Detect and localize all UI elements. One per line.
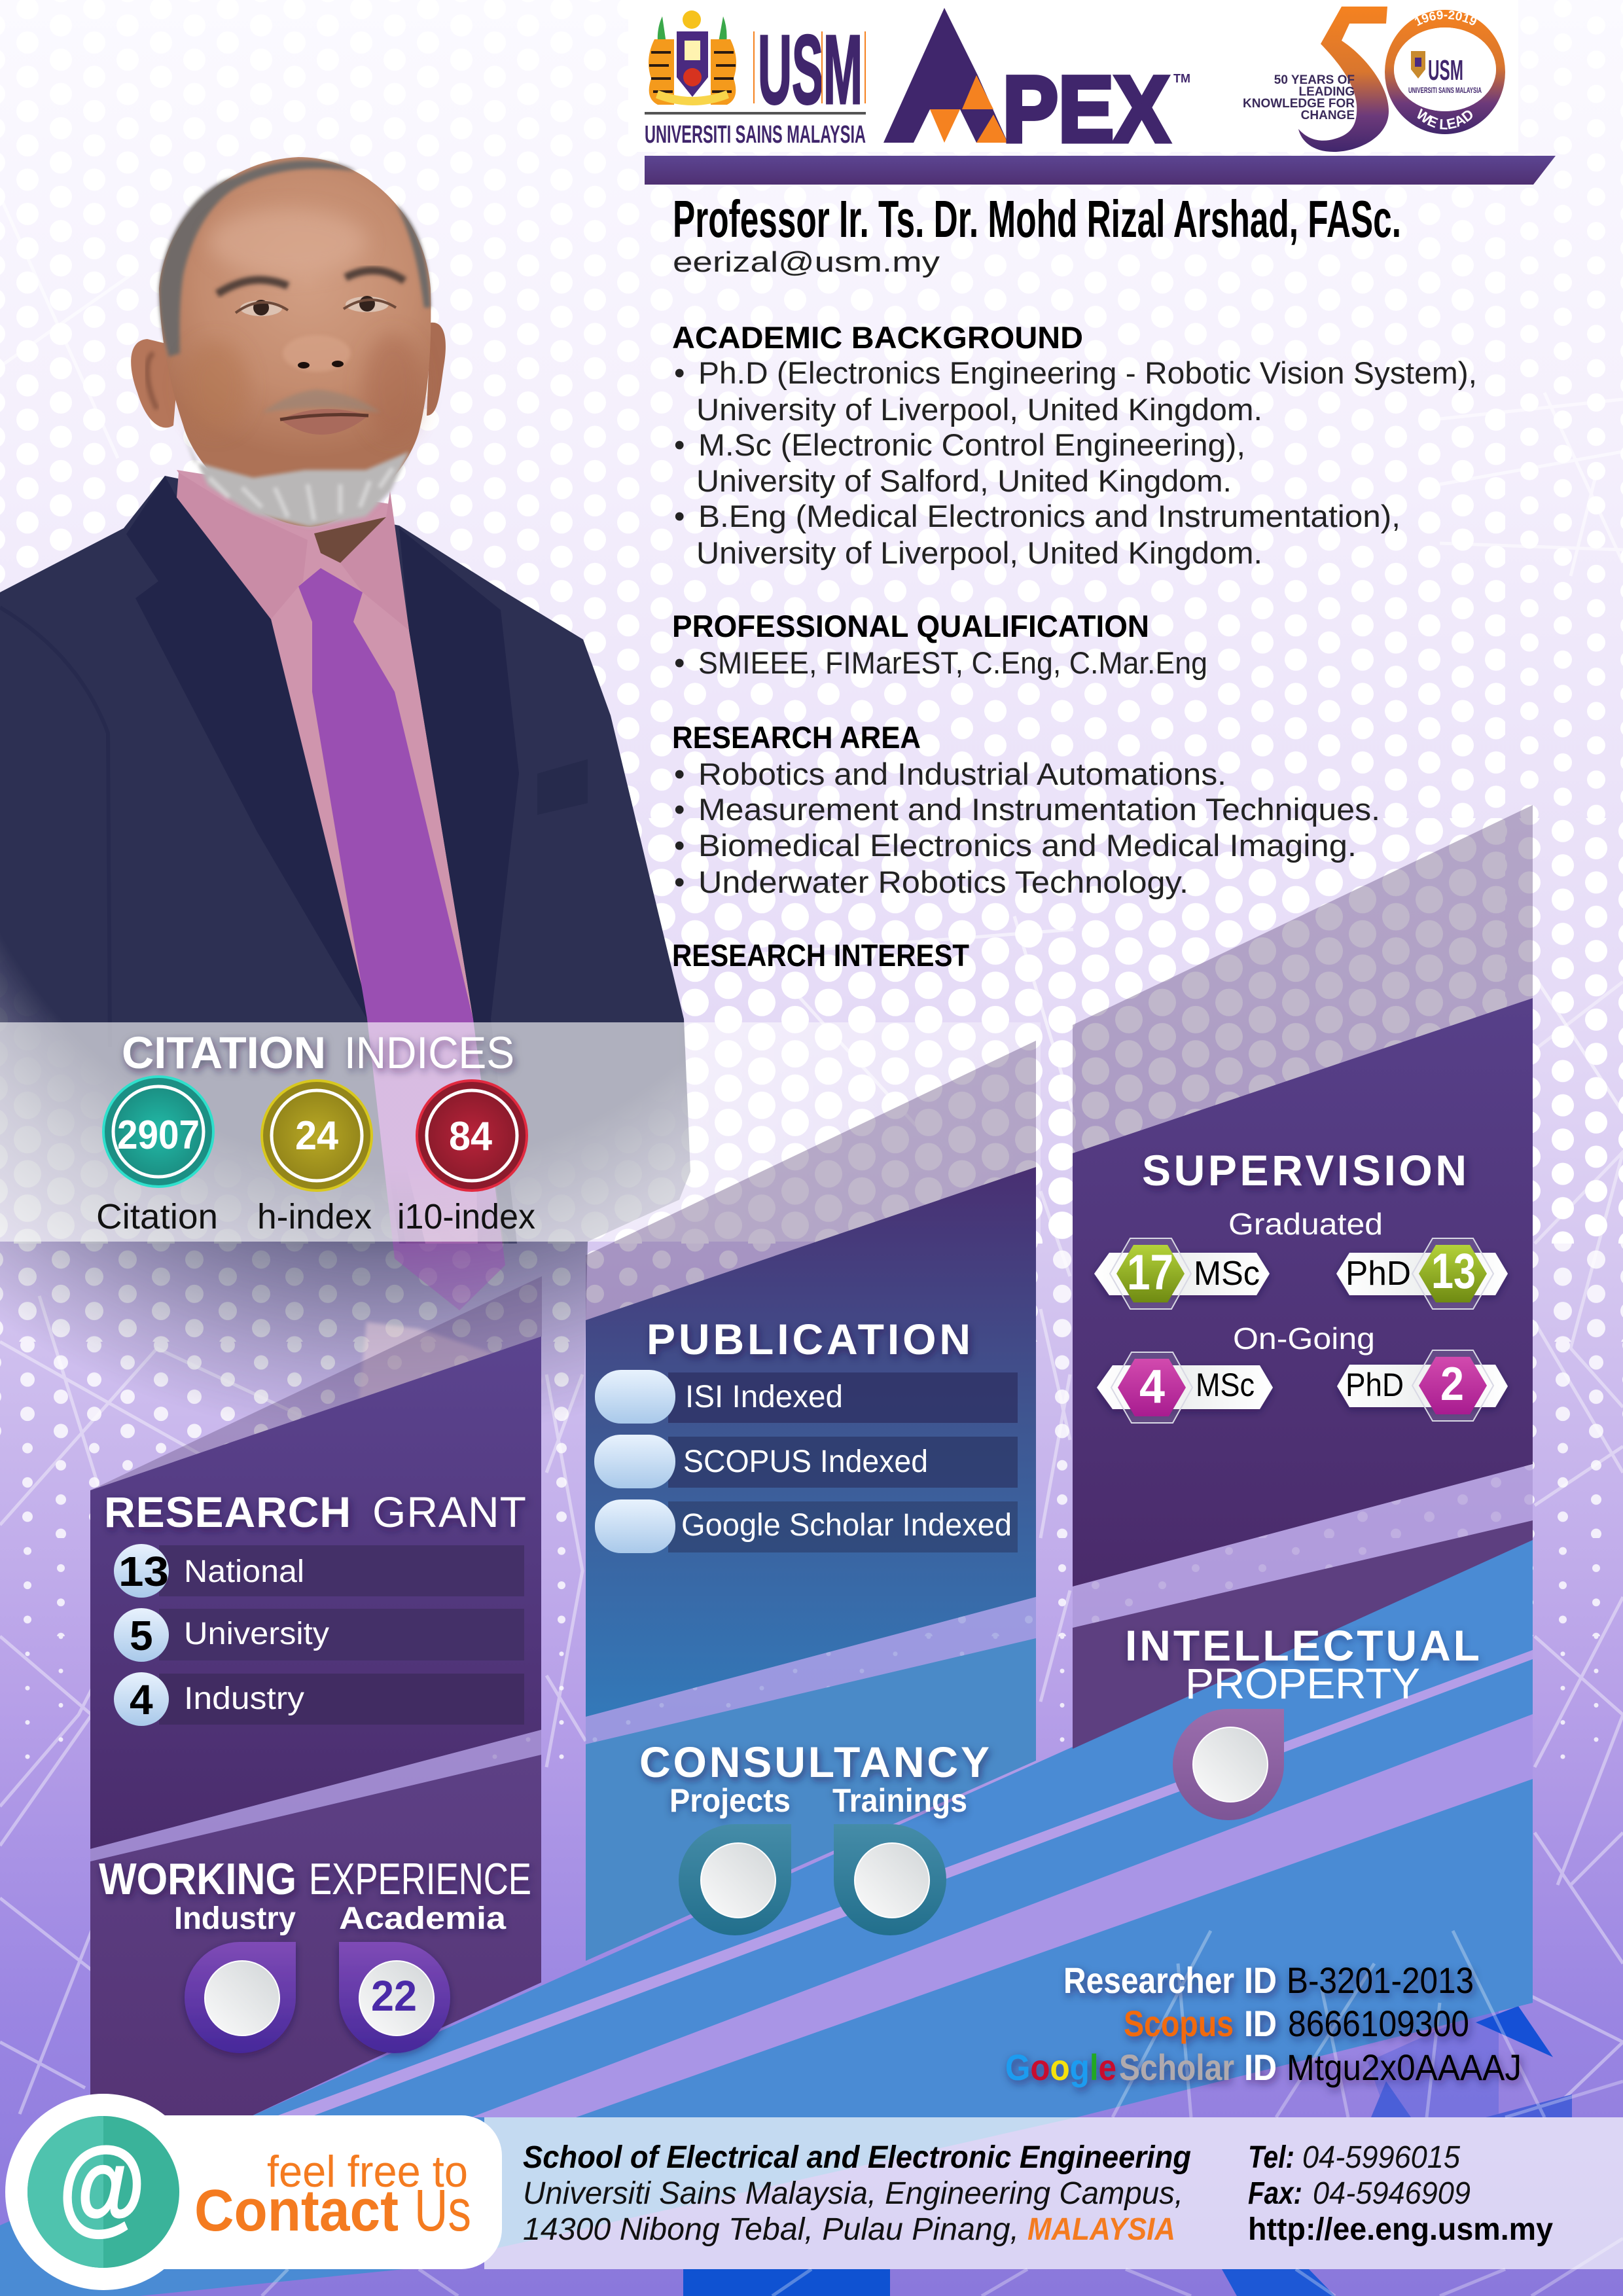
- text block: academic background: University of Salford, United Kingdom.: [696, 463, 1232, 498]
- translucent pane above research grant: [90, 1276, 542, 1490]
- panel: supervision: [1073, 998, 1533, 1587]
- text block: academic background: M.Sc (Electronic Control Engineering),: [698, 427, 1245, 462]
- phone, fax and website: Fax:: [1248, 2176, 1302, 2211]
- eyes: [236, 296, 396, 316]
- text block: professional qualification: SMIEEE, FIMarEST, C.Eng, C.Mar.Eng: [698, 645, 1207, 680]
- logo: 50 years: LEADING: [1298, 85, 1355, 99]
- badge: i10-index 84: 84: [449, 1114, 492, 1159]
- panel: publication: [586, 1167, 1036, 1717]
- item: university: 5: [130, 1612, 153, 1659]
- text block: professional qualification: [672, 609, 1207, 680]
- lower background network lines: [262, 1931, 1623, 2296]
- scopus id: ID: [1244, 2003, 1277, 2044]
- collars: [177, 473, 308, 619]
- logo: 50 years: KNOWLEDGE FOR: [1243, 97, 1355, 111]
- panel: research grant: [90, 1336, 541, 1849]
- citation labels: [96, 1197, 535, 1236]
- badge: h-index 24: 24: [295, 1113, 338, 1158]
- badge: graduated msc 17: 17: [1127, 1245, 1173, 1300]
- badge: on-going phd 2: [1337, 1350, 1508, 1421]
- text block: research area: •: [674, 792, 685, 827]
- logo: USM wordmark: UNIVERSITI SAINS MALAYSIA: [645, 121, 866, 149]
- google scholar id: ID: [1244, 2047, 1277, 2088]
- logo: 50 years: CHANGE: [1301, 109, 1355, 122]
- google scholar id: Scholar: [1119, 2047, 1234, 2088]
- cheek shading: [183, 209, 422, 439]
- divider band publication/consultancy: [586, 1597, 1036, 1744]
- badge: on-going msc 4: 4: [1139, 1361, 1165, 1413]
- address: Universiti Sains Malaysia, Engineering Campus,: [523, 2176, 1183, 2211]
- mouth: [280, 409, 368, 435]
- scopus id: [1124, 2003, 1469, 2044]
- citation labels: h-index: [257, 1197, 372, 1236]
- email: eerizal@usm.my: [673, 246, 940, 278]
- research interest heading: RESEARCH INTEREST: [672, 938, 969, 973]
- heading: working experience: [99, 1854, 531, 1904]
- hair: [159, 160, 431, 357]
- item: google scholar indexed: [595, 1499, 1012, 1553]
- icon: at sign: [27, 2116, 179, 2268]
- text block: research area: •: [674, 828, 685, 863]
- citation title: INDICES: [344, 1028, 514, 1078]
- text block: research area: RESEARCH AREA: [672, 720, 921, 755]
- phone, fax and website: 04-5946909: [1313, 2176, 1471, 2211]
- item: isi indexed: ISI Indexed: [685, 1380, 843, 1414]
- panel: supervision: On-Going: [1233, 1321, 1375, 1355]
- lower right background polygons: [683, 2003, 1572, 2296]
- badge: h-index 24: [262, 1081, 372, 1191]
- text block: academic background: •: [674, 355, 685, 390]
- background network lines upper: [0, 196, 1623, 1126]
- blue diagonal band: [0, 1540, 1533, 2296]
- badge: on-going phd 2: PhD: [1346, 1367, 1404, 1403]
- scopus id: 8666109300: [1288, 2003, 1469, 2044]
- badge: i10-index 84: [417, 1081, 527, 1191]
- badge: on-going msc 4: [1097, 1352, 1273, 1423]
- heading: working experience: WORKING: [99, 1854, 296, 1904]
- heading: intellectual property: INTELLECTUAL: [1125, 1621, 1480, 1670]
- shirt: [177, 470, 504, 1244]
- nose: [283, 335, 351, 372]
- heading: research grant: RESEARCH: [104, 1488, 351, 1536]
- background dot pattern: [0, 0, 1623, 1767]
- white backing behind logos: [628, 0, 1518, 152]
- lapels: [126, 476, 588, 1244]
- google scholar id: Mtgu2x0AAAAJ: [1287, 2047, 1522, 2088]
- moustache: [262, 389, 382, 413]
- brows: [217, 270, 404, 294]
- contact slogan: Us: [414, 2178, 471, 2244]
- text block: research area: •: [674, 865, 685, 899]
- item: national: 13: [118, 1548, 169, 1595]
- badge: projects: [679, 1824, 791, 1935]
- item: university: University: [184, 1617, 329, 1651]
- text block: professional qualification: •: [674, 645, 685, 680]
- logo: USM wordmark: [645, 14, 866, 149]
- logo: 50 years: UNIVERSITI SAINS MALAYSIA: [1408, 86, 1482, 95]
- panel: intellectual property: PROPERTY: [1185, 1659, 1420, 1708]
- beard: [181, 429, 409, 527]
- scopus id: Scopus: [1124, 2003, 1234, 2044]
- phone, fax and website: http://ee.eng.usm.my: [1248, 2212, 1553, 2247]
- address: School of Electrical and Electronic Engineering: [523, 2140, 1191, 2175]
- badge: academia years: [339, 1942, 450, 2053]
- ears: [131, 323, 446, 427]
- researcher ids: [1005, 1960, 1522, 2088]
- address: MALAYSIA: [1027, 2212, 1175, 2247]
- head: [159, 157, 431, 527]
- translucent pane above publication: [586, 1041, 1036, 1320]
- heading: research grant: GRANT: [372, 1488, 526, 1536]
- translucent pane above supervision: [1073, 805, 1533, 1153]
- text block: academic background: University of Liverpool, United Kingdom.: [696, 535, 1262, 570]
- item: university: [114, 1608, 329, 1662]
- citation title: CITATION: [122, 1028, 326, 1078]
- logo: APEX: PEX: [1003, 58, 1169, 162]
- text block: research area: [672, 720, 1380, 899]
- panel: working experience: [90, 1755, 541, 2117]
- badge: academia years: 22: [371, 1971, 417, 2020]
- contact slogan: feel free to: [267, 2147, 468, 2197]
- phone, fax and website: [1248, 2140, 1553, 2247]
- item: industry: Industry: [184, 1681, 304, 1716]
- item: scopus indexed: [594, 1435, 928, 1488]
- citation labels: Citation: [96, 1197, 218, 1236]
- badge: on-going msc 4: MSc: [1196, 1367, 1255, 1403]
- text: USM: [758, 14, 863, 124]
- heading: working experience: EXPERIENCE: [309, 1854, 531, 1904]
- google scholar id: Google: [1005, 2047, 1116, 2088]
- researcher id: ID: [1244, 1960, 1277, 2001]
- badge: graduated phd 13: PhD: [1346, 1255, 1411, 1293]
- panel: intellectual property: [1073, 1520, 1533, 1820]
- text block: academic background: [672, 320, 1477, 570]
- text block: academic background: Ph.D (Electronics Engineering - Robotic Vision System),: [698, 355, 1477, 390]
- item: google scholar indexed: Google Scholar Indexed: [681, 1508, 1012, 1543]
- citation band: [0, 1022, 1041, 1242]
- portrait of Professor: [0, 157, 690, 1460]
- text block: research area: Robotics and Industrial Automations.: [698, 757, 1226, 791]
- icon: at sign: @: [59, 2126, 145, 2244]
- divider band research/working: [90, 1730, 541, 1861]
- badge: citation 2907: [103, 1077, 213, 1187]
- text block: research area: Measurement and Instrumentation Techniques.: [698, 792, 1380, 827]
- panel: working experience: Industry: [174, 1901, 296, 1936]
- contact slogan: [194, 2147, 471, 2244]
- citation labels: i10-index: [397, 1197, 535, 1236]
- contact bar: [5, 2094, 1623, 2290]
- logo: 50 years: WE LEAD: [1413, 106, 1476, 133]
- citation title: [122, 1028, 514, 1078]
- heading: supervision: SUPERVISION: [1142, 1146, 1467, 1194]
- suit jacket: [0, 476, 690, 1460]
- text block: research area: Biomedical Electronics and Medical Imaging.: [698, 828, 1357, 863]
- neck: [314, 517, 386, 563]
- text block: research area: Underwater Robotics Technology.: [698, 865, 1188, 899]
- badge: industry years: [185, 1942, 296, 2053]
- logo: 50 years: 1969-2019: [1415, 10, 1476, 26]
- logo: APEX: [883, 8, 1190, 162]
- contact tab: [5, 2094, 502, 2290]
- heading: consultancy: CONSULTANCY: [639, 1738, 990, 1786]
- background network lines: [0, 982, 1623, 2117]
- header bar: [645, 156, 1556, 185]
- panel: consultancy: Projects: [669, 1782, 791, 1819]
- badge: trainings: [834, 1824, 946, 1935]
- item: national: National: [184, 1554, 304, 1589]
- google scholar id: [1005, 2047, 1522, 2088]
- heading: publication: PUBLICATION: [647, 1315, 971, 1363]
- logo: USM crest: [649, 10, 736, 105]
- text block: academic background: B.Eng (Medical Electronics and Instrumentation),: [698, 499, 1400, 533]
- logo: 50 years: USM: [1428, 54, 1463, 86]
- hand: [353, 1322, 543, 1460]
- text block: academic background: University of Liverpool, United Kingdom.: [696, 392, 1262, 427]
- badge: graduated phd 13: [1336, 1238, 1508, 1309]
- panel: consultancy: Trainings: [832, 1782, 967, 1819]
- panel: supervision: Graduated: [1228, 1207, 1383, 1241]
- text block: professional qualification: PROFESSIONAL QUALIFICATION: [672, 609, 1149, 643]
- text block: academic background: •: [674, 427, 685, 462]
- tie: [298, 568, 505, 1310]
- badge: on-going phd 2: 2: [1440, 1358, 1464, 1410]
- panel: working experience: Academia: [339, 1901, 506, 1936]
- contact slogan: Contact: [194, 2178, 399, 2244]
- item: isi indexed: [595, 1370, 843, 1424]
- logo: 50 years: 50 YEARS OF: [1274, 73, 1355, 87]
- researcher id: B-3201-2013: [1287, 1960, 1474, 2001]
- item: national: [114, 1544, 304, 1598]
- item: scopus indexed: SCOPUS Indexed: [683, 1444, 928, 1479]
- item: industry: [114, 1672, 304, 1726]
- heading: research grant: [104, 1488, 526, 1536]
- badge: graduated msc 17: MSc: [1194, 1255, 1260, 1293]
- panel: consultancy: [586, 1638, 1036, 1961]
- address: 14300 Nibong Tebal, Pulau Pinang,: [523, 2212, 1019, 2247]
- researcher id: Researcher: [1063, 1960, 1234, 2001]
- researcher id: [1063, 1960, 1474, 2001]
- badge: graduated phd 13: 13: [1431, 1244, 1476, 1299]
- item: industry: 4: [130, 1676, 153, 1723]
- address: [523, 2140, 1191, 2247]
- phone, fax and website: 04-5996015: [1302, 2140, 1460, 2175]
- text block: research area: •: [674, 757, 685, 791]
- divider band supervision/IP: [1073, 1464, 1533, 1628]
- text block: academic background: •: [674, 499, 685, 533]
- text block: academic background: ACADEMIC BACKGROUND: [672, 320, 1083, 355]
- logo: APEX: TM: [1173, 72, 1190, 85]
- badge: graduated msc 17: [1094, 1238, 1270, 1309]
- badge: citation 2907: 2907: [117, 1113, 200, 1158]
- phone, fax and website: Tel:: [1248, 2140, 1294, 2175]
- badge: IP: [1173, 1709, 1284, 1820]
- arm seam: [0, 607, 110, 1047]
- logo: 50 years: [1243, 7, 1505, 152]
